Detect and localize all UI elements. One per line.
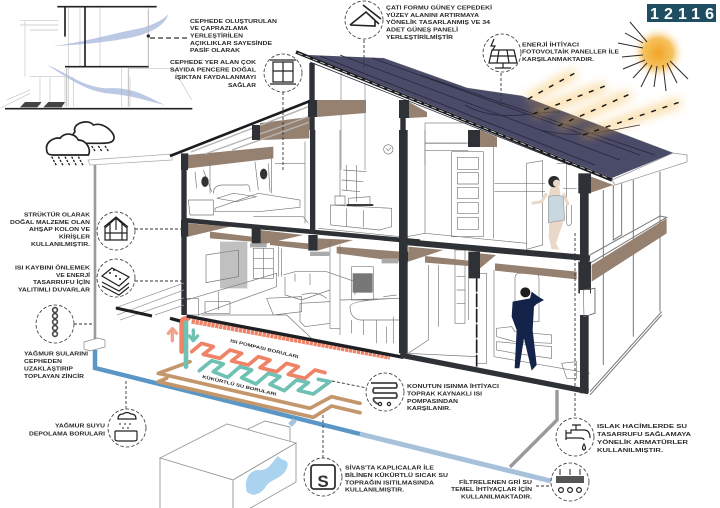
text: heat pump	[407, 383, 500, 412]
icon: grey water filter	[551, 463, 589, 501]
id badge: 12116	[650, 6, 714, 23]
kitchen unit and shelves	[318, 130, 400, 237]
text: sulphur water: KULLANILMIŞTIR.	[345, 488, 405, 494]
text: daylight: SAYIDA PENCERE DOĞAL	[170, 66, 256, 74]
text: cross ventilation: CEPHEDE OLUŞTURULAN	[190, 19, 278, 25]
icon: sulphur S	[304, 458, 342, 496]
icon: roof form	[345, 1, 383, 39]
text: energy	[522, 42, 620, 63]
text: timber structure: KULLANILMIŞTIR.	[31, 242, 91, 248]
towel figure	[532, 176, 568, 249]
sun	[618, 22, 688, 91]
bedroom	[188, 142, 308, 223]
standing man	[512, 292, 544, 371]
text: heat pump: KONUTUN ISINMA İHTİYACI	[407, 383, 500, 390]
text: cross ventilation	[190, 19, 278, 54]
pipe label: sulphur water: KÜKÜRTLÜ SU BORULARI	[202, 374, 277, 397]
text: daylight: SAĞLAR	[228, 81, 256, 89]
text: energy: ENERJİ İHTİYACI	[522, 42, 580, 48]
text: cross ventilation: AÇIKLIKLAR SAYESİNDE	[190, 40, 273, 47]
heat flow arrows	[168, 329, 177, 341]
icon: window	[264, 54, 302, 92]
ground heat pipes	[158, 318, 390, 417]
text: heat pump: POMPASINDAN	[407, 399, 459, 405]
text: grey water: TEMEL İHTİYAÇLAR İÇİN	[451, 486, 533, 493]
text: cross ventilation: YERLEŞTİRİLEN	[190, 32, 244, 40]
structure	[403, 130, 584, 393]
left terrace	[115, 283, 184, 320]
text: sulphur water: BİLİNEN KÜKÜRTLÜ SICAK SU	[345, 472, 449, 479]
text: wet areas: YÖNELİK ARMATÜRLER	[597, 439, 688, 446]
text: daylight: IŞIKTAN FAYDALANMAYI	[175, 75, 257, 81]
text: insulation: ISI KAYBINI ÖNLEMEK	[15, 264, 91, 272]
text: heat pump: KARŞILANIR.	[407, 406, 452, 412]
text: roof form: YÜZEY ALANINI ARTIRMAYA	[386, 12, 480, 19]
text: rain chain: YAĞMUR SULARINI	[24, 350, 89, 358]
text: insulation: YALITIMLI DUVARLAR	[18, 288, 91, 294]
leader: ventilation	[150, 37, 188, 39]
house: bathroom section	[400, 130, 667, 395]
text: roof form: YERLEŞTİRİLMİŞTİR	[386, 34, 454, 41]
text: rainwater storage: DEPOLAMA BORULARI	[29, 432, 106, 438]
downpipe and rain water pipe	[84, 154, 557, 481]
text: grey water: KULLANILMAKTADIR.	[461, 494, 533, 500]
text: energy: KARŞILANMAKTADIR.	[522, 57, 595, 63]
text: roof form: ADET GÜNEŞ PANELİ	[386, 26, 459, 34]
text: rain chain: CEPHEDEN	[24, 359, 63, 365]
text: daylight: CEPHEDE YER ALAN ÇOK	[170, 60, 257, 66]
walls and door	[407, 130, 590, 378]
underground water tank	[160, 420, 296, 508]
text: wet areas: ISLAK HACİMLERDE SU	[597, 423, 687, 430]
text: insulation: TASARRUFU İÇİN	[33, 279, 91, 286]
text: timber structure: AHŞAP KOLON VE	[29, 227, 91, 233]
text: roof form: ÇATI FORMU GÜNEY CEPEDEKİ	[386, 4, 493, 12]
text: rainwater storage	[29, 422, 106, 438]
living room	[187, 242, 400, 343]
upper attic structure	[181, 63, 497, 170]
text: insulation	[15, 264, 91, 294]
text: cross ventilation: PASİF OLARAK	[190, 47, 241, 54]
text: daylight	[170, 60, 257, 89]
icon: timber frame	[97, 212, 135, 250]
house: left and middle section	[170, 130, 420, 357]
icon: rain chain	[36, 305, 74, 343]
rain clouds	[46, 122, 114, 166]
text: rain chain	[24, 350, 89, 380]
icon: sulphur S: S	[317, 472, 329, 491]
beams	[188, 130, 400, 262]
pipe label: heat pump: ISI POMPASI BORULARI	[230, 338, 299, 359]
text: grey water	[451, 479, 533, 500]
beams	[408, 132, 613, 279]
sun beams on roof	[528, 73, 680, 135]
text: rainwater storage: YAĞMUR SUYU	[55, 422, 106, 430]
text: heat pump: TOPRAK KAYNAKLI ISI	[407, 392, 483, 398]
text: cross ventilation: VE ÇAPRAZLAMA	[190, 26, 249, 32]
icon: photovoltaic panel	[483, 34, 521, 72]
text: sulphur water: TOPRAĞIN ISITILMASINDA	[345, 478, 435, 486]
icon: water tap	[556, 418, 594, 456]
text: wet areas	[597, 423, 691, 454]
text: rain chain: TOPLAYAN ZİNCİR	[24, 373, 85, 380]
text: insulation: VE ENERJİ	[56, 272, 91, 279]
icon: rainwater storage	[108, 409, 146, 447]
text: timber structure: KİRİŞLER	[59, 234, 91, 240]
icon: wall insulation	[97, 259, 135, 297]
text: grey water: FİLTRELENEN GRİ SU	[459, 479, 533, 486]
text: roof form	[386, 4, 493, 41]
text: wet areas: TASARRUFU SAĞLAMAYA	[597, 430, 691, 438]
text: timber structure: DOĞAL MALZEME OLAN	[10, 218, 91, 226]
text: roof form: YÖNELİK TASARLANMIŞ VE 34	[386, 19, 490, 26]
text: timber structure: STRÜKTÜR OLARAK	[24, 212, 91, 218]
facade	[583, 172, 667, 395]
text: sulphur water: SİVAS'TA KAPLICALAR İLE	[345, 464, 435, 472]
text: rain chain: UZAKLAŞTIRIP	[24, 366, 74, 372]
text: timber structure	[10, 212, 91, 248]
structure	[184, 130, 403, 357]
text: energy: FOTOVOLTAİK PANELLER İLE	[522, 48, 620, 56]
text: wet areas: KULLANILMIŞTIR.	[597, 448, 664, 454]
water splash	[246, 456, 288, 495]
section diagram: passive ventilation	[0, 7, 192, 109]
text: sulphur water	[345, 464, 449, 494]
leaders	[74, 40, 575, 486]
icon: heat coil	[366, 373, 404, 411]
solar roof	[170, 52, 687, 185]
